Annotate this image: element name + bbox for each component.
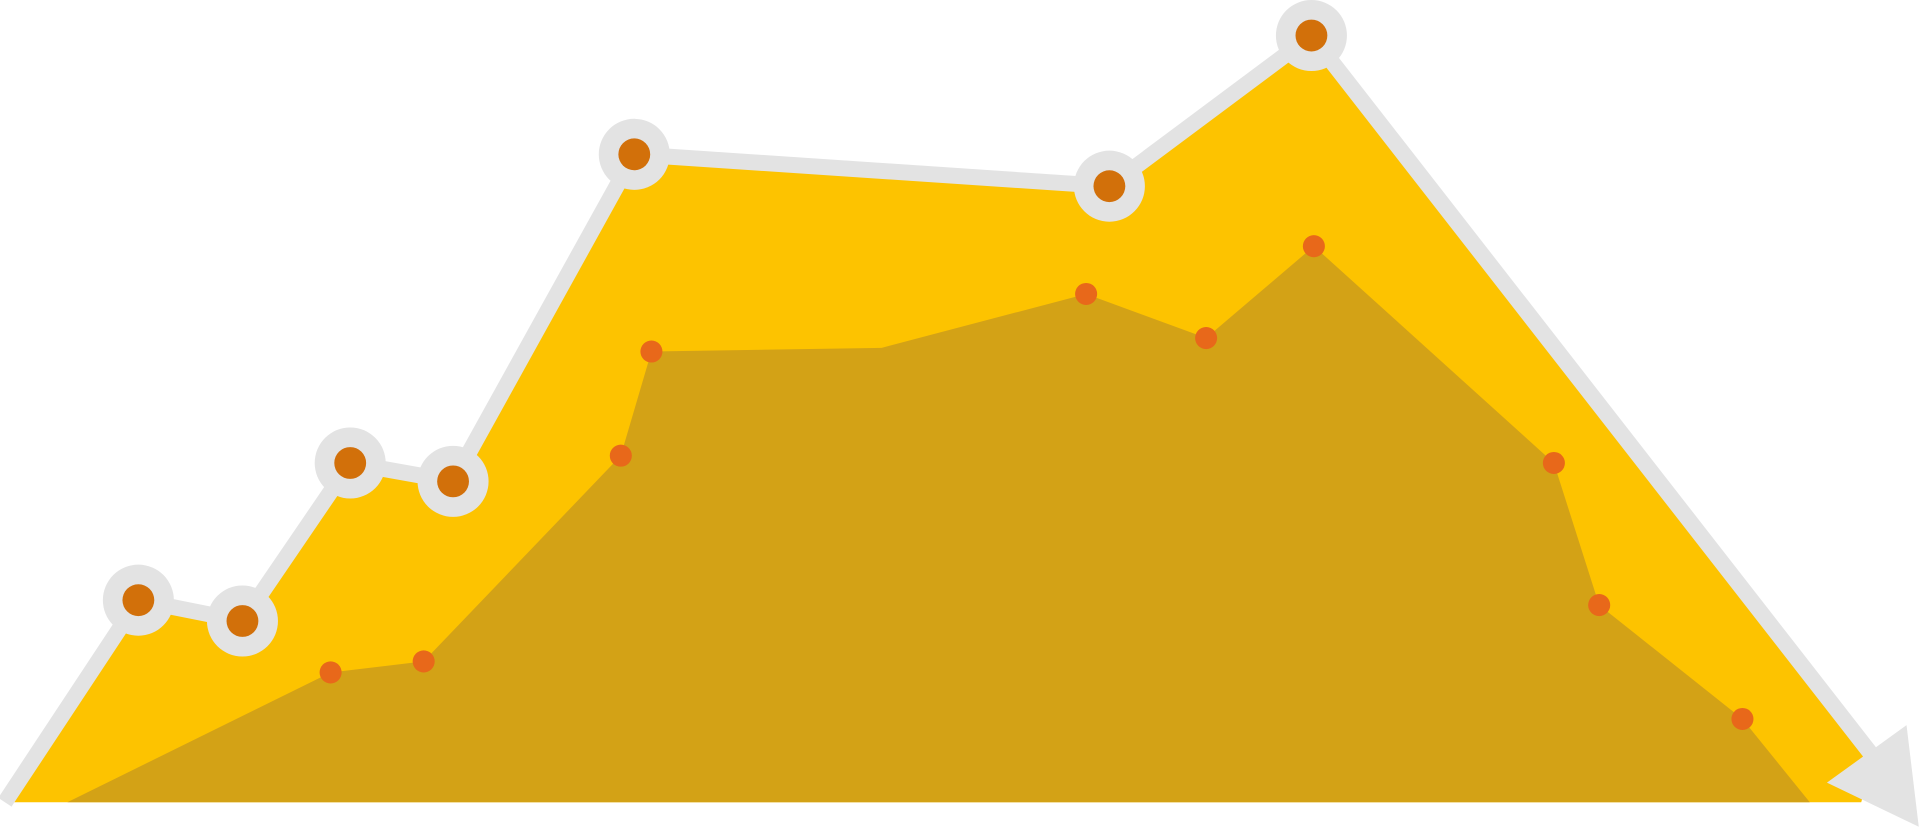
- outer markers: [103, 0, 1347, 657]
- arrow head: [1827, 725, 1919, 827]
- inner dark area: [67, 246, 1810, 802]
- inner orange dots: [320, 235, 1753, 730]
